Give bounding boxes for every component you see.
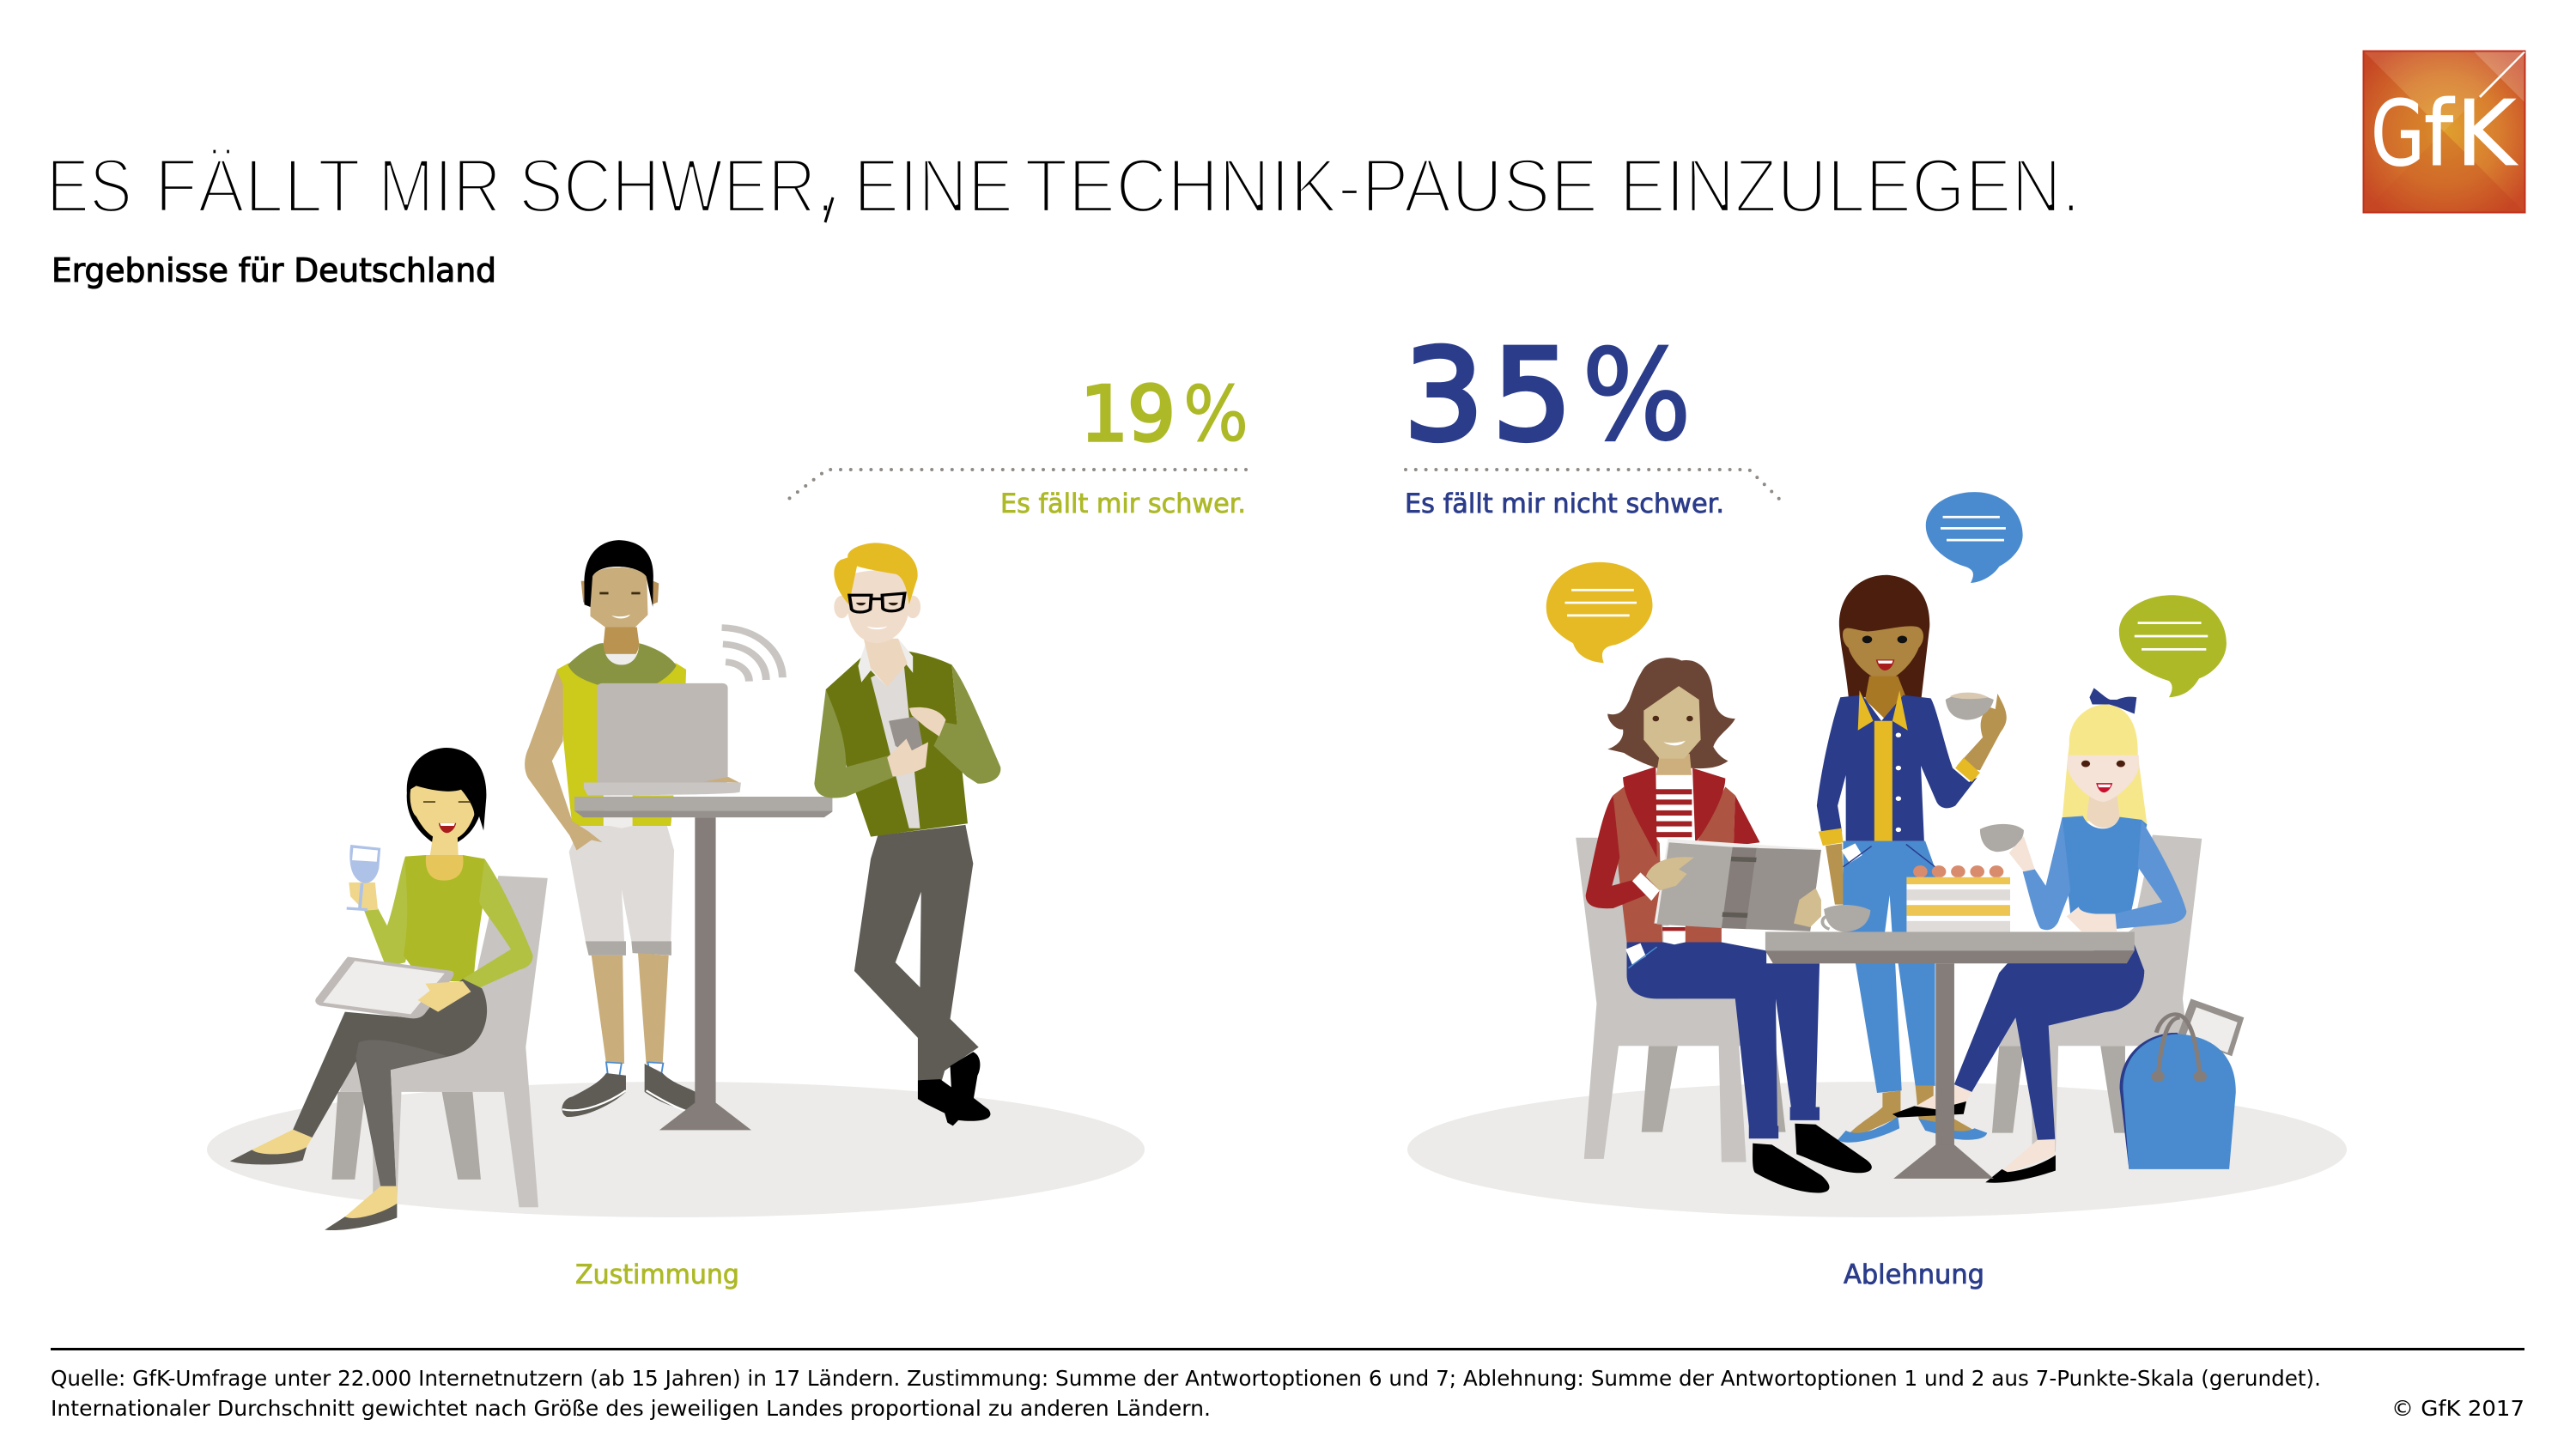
logo: GfK: G — [2371, 82, 2425, 186]
stat: 19 percent: 19 — [1080, 370, 1176, 458]
subtitle: Ergebnisse für Deutschland — [52, 252, 496, 289]
chair right — [1992, 834, 2202, 1152]
copyright: © GfK 2017 — [2391, 1396, 2524, 1421]
cake — [1906, 865, 2010, 931]
logo: GfK: f — [2424, 82, 2455, 186]
source note — [51, 1366, 2321, 1421]
speech bubble yellow — [1546, 562, 1653, 663]
speech bubble green — [2119, 595, 2227, 697]
high table — [574, 797, 832, 1130]
dotted bracket: rejection — [1406, 470, 1781, 501]
caption: Ablehnung: Ablehnung — [1844, 1259, 1984, 1290]
logo: GfK: K — [2456, 82, 2518, 186]
seated woman right — [1893, 688, 2186, 1183]
title — [46, 143, 2081, 228]
speech bubble blue — [1926, 492, 2023, 583]
stat: 35 percent: 35 — [1404, 323, 1572, 469]
stat: 19 percent: % — [1183, 370, 1249, 458]
stat: 19 percent — [1080, 370, 1249, 458]
standing man with phone — [814, 543, 1000, 1125]
cafe table — [1765, 931, 2135, 1179]
caption: Zustimmung: Zustimmung — [575, 1259, 739, 1290]
footer rule — [51, 1348, 2524, 1350]
title: SCHWER, — [519, 143, 835, 228]
chair left — [1576, 838, 1785, 1162]
source note: Quelle: GfK-Umfrage unter 22.000 Internetnutzern (ab 15 Jahren) in 17 Ländern. Zustimmung: Summe der Antwortoptionen 6 und 7; Ablehnung: Summe der Antwortoptionen 1 und 2 aus 7-Punkte-Skala (gerundet). — [51, 1366, 2321, 1391]
stat: 35 percent — [1404, 323, 1692, 469]
title: FÄLLT — [155, 143, 361, 228]
chair — [331, 876, 548, 1207]
standing woman — [1817, 575, 2007, 1143]
ground ellipse right — [1407, 1082, 2347, 1217]
source note: Internationaler Durchschnitt gewichtet nach Größe des jeweiligen Landes proportional zu anderen Ländern. — [51, 1396, 1211, 1421]
coffee cup — [1822, 905, 1870, 931]
seated woman — [230, 748, 533, 1230]
illustration: rejection group — [1546, 492, 2244, 1192]
logo: GfK — [2363, 51, 2525, 213]
title: EINE — [854, 143, 1013, 228]
ground ellipse left — [207, 1082, 1145, 1217]
seated woman left — [1586, 658, 1872, 1192]
illustration: agreement group — [230, 540, 1000, 1230]
bag with tablet — [2120, 998, 2244, 1169]
standing man with laptop — [525, 540, 741, 1117]
title: MIR — [378, 143, 501, 228]
title: ES — [46, 143, 132, 228]
title: TECHNIK-PAUSE — [1024, 143, 1598, 228]
icon: wifi — [722, 628, 782, 682]
stat: 35 percent: % — [1582, 323, 1692, 469]
label: agreement statement: Es fällt mir schwer. — [1000, 488, 1246, 519]
label: rejection statement: Es fällt mir nicht schwer. — [1405, 488, 1724, 519]
dotted bracket: agreement — [787, 470, 1246, 501]
title: EINZULEGEN. — [1619, 143, 2081, 228]
